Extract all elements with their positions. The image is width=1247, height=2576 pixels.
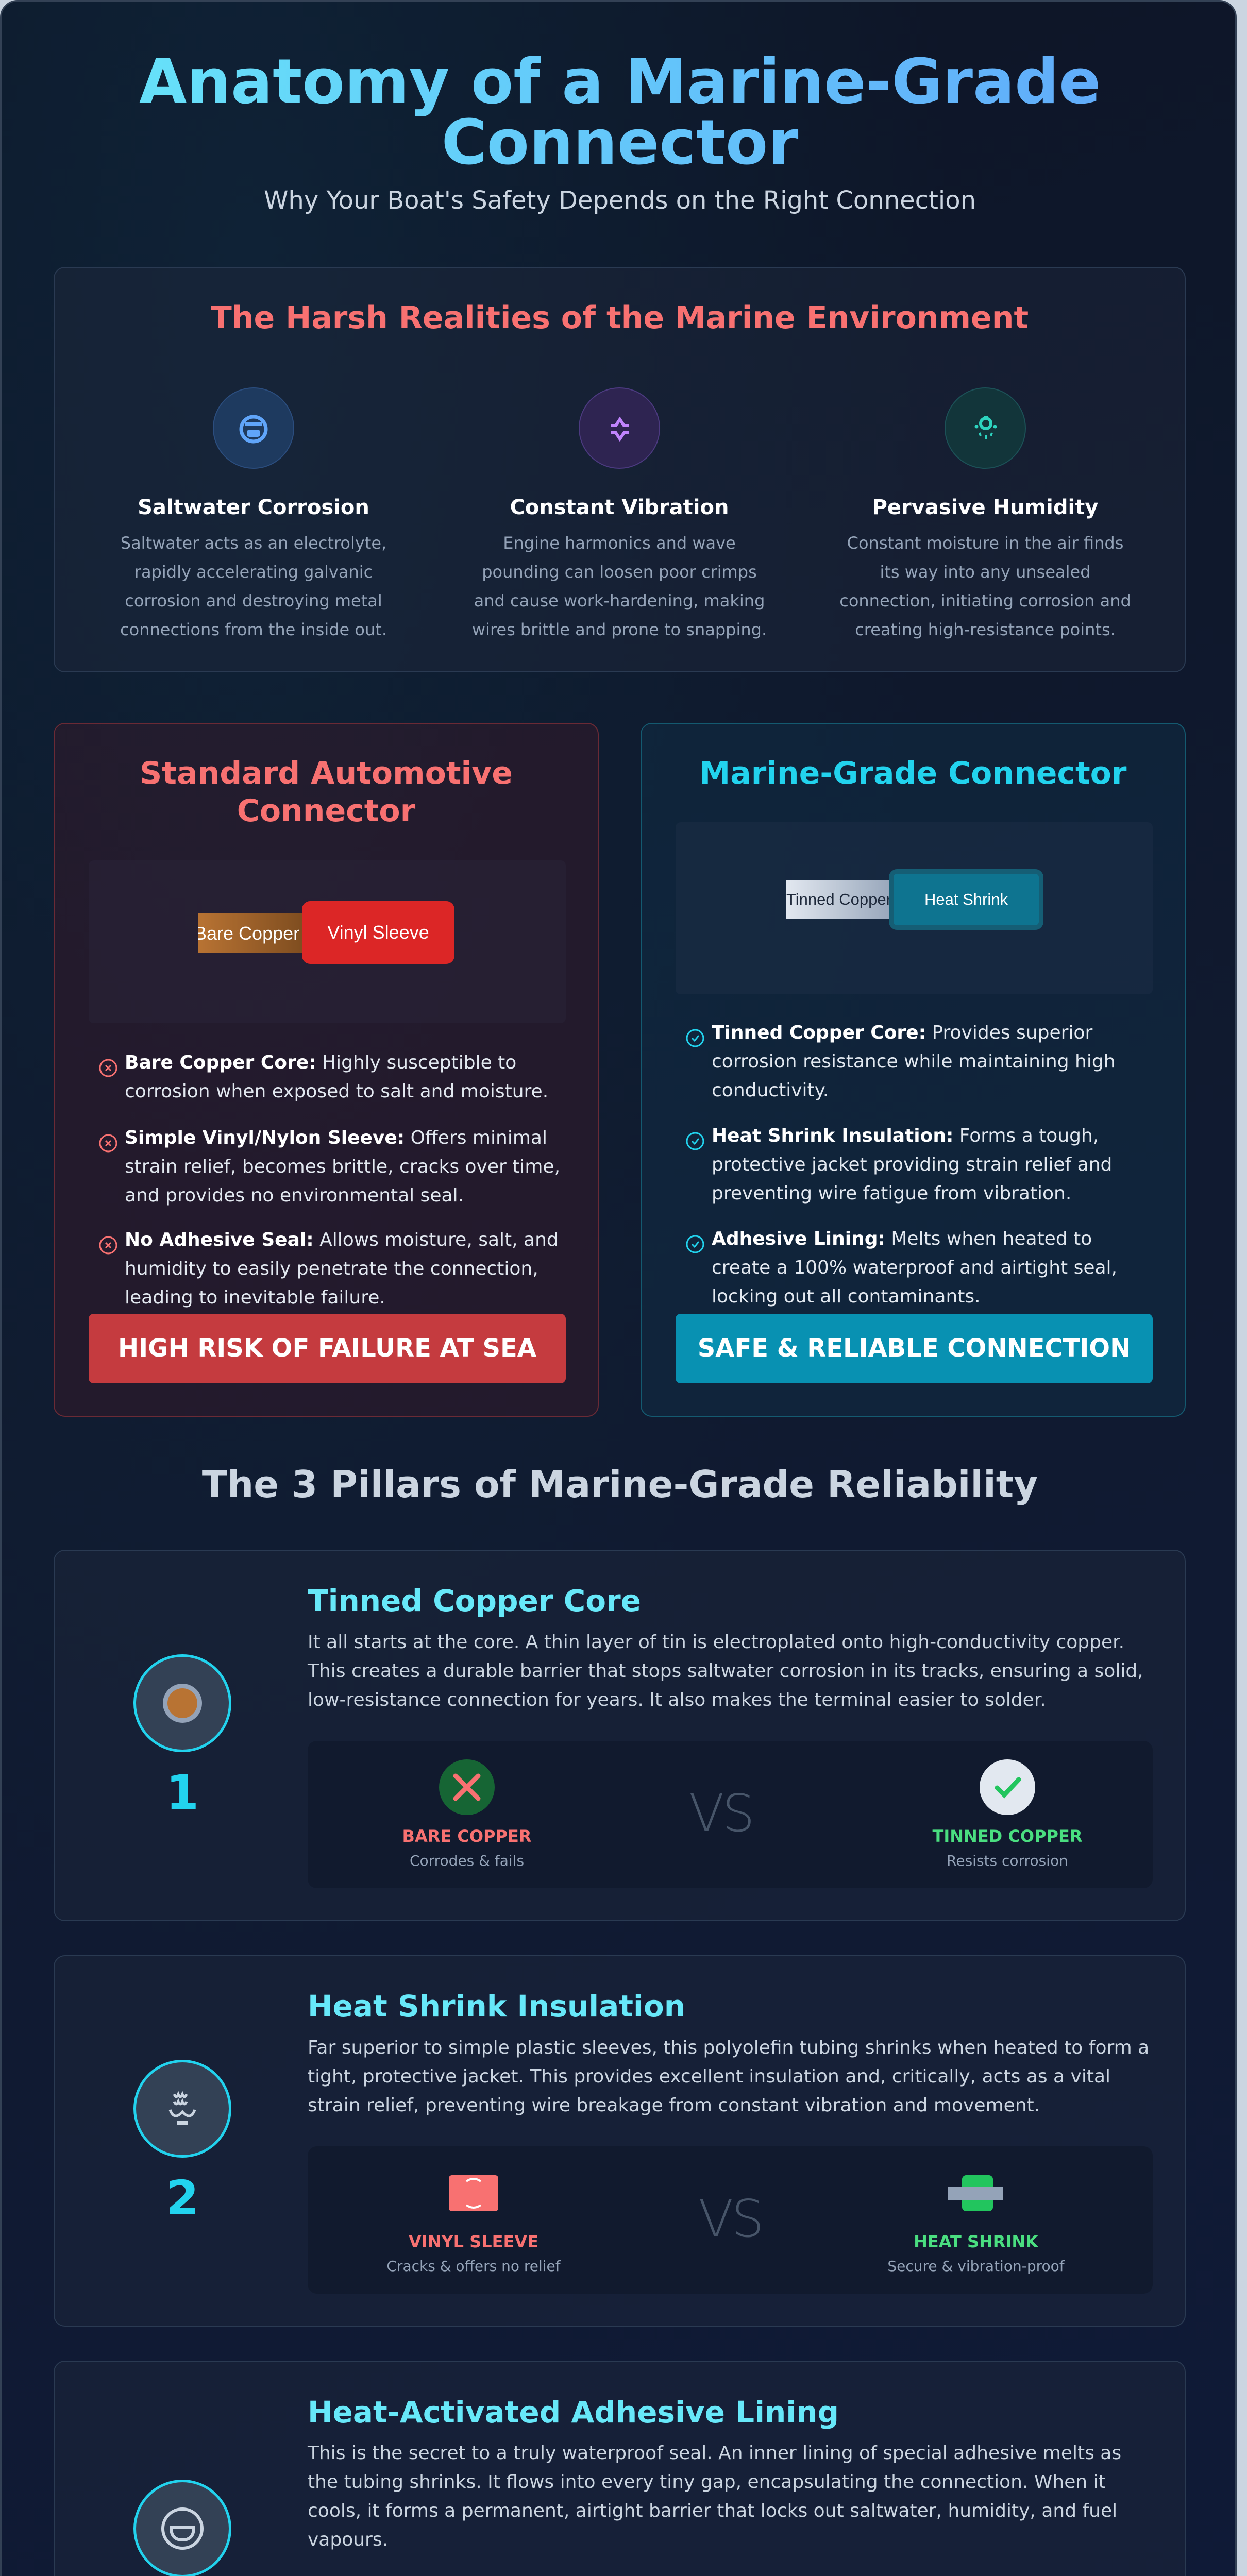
panel heading: The Harsh Realities of the Marine Environment [211,300,1029,336]
bullet: no adhesive seal [99,1229,559,1308]
bullet: tinned copper core: Tinned Copper Core: Provides superior [712,1022,1092,1043]
paragraph [307,1632,1143,1710]
bullet: tinned copper core [686,1022,1116,1101]
paragraph: tight, protective jacket. This provides excellent insulation and, critically, acts as a vital [308,2066,1110,2087]
comparison box [308,1741,1153,1888]
paragraph: cools, it forms a permanent, airtight barrier that locks out saltwater, humidity, and fuel [308,2500,1117,2521]
subtitle: Why Your Boat's Safety Depends on the Right Connection [264,186,976,215]
label: tinned copper: TINNED COPPER [933,1826,1082,1846]
banner: high risk: HIGH RISK OF FAILURE AT SEA [118,1334,536,1363]
vs: VS [698,2189,762,2249]
description: Saltwater acts as an electrolyte, [121,533,386,553]
heat shrink [889,869,1043,930]
paragraph [308,2439,1173,2554]
label: heat shrink: HEAT SHRINK [914,2232,1038,2251]
heading: Connector [237,793,415,829]
number 1: 1 [166,1765,199,1820]
label: bare copper: BARE COPPER [402,1826,531,1846]
description: wires brittle and prone to snapping. [472,620,767,639]
bullet: no adhesive seal: No Adhesive Seal: Allows moisture, salt, and [125,1229,559,1250]
bullet: vinyl sleeve: Simple Vinyl/Nylon Sleeve: Offers minimal [125,1127,547,1148]
sub: resists: Resists corrosion [947,1852,1068,1869]
description [839,533,1131,639]
bullet: no adhesive seal: humidity to easily penetrate the connection, [125,1258,538,1279]
title [2,52,1238,174]
tinned copper bar: Tinned Copper [786,890,891,908]
title: Heat Shrink Insulation [308,1989,685,2024]
bullet: tinned copper core: corrosion resistance while maintaining high [712,1051,1116,1072]
vinyl sleeve [302,901,454,964]
bullet: adhesive lining [686,1228,1117,1307]
bullet: heat shrink insulation: Heat Shrink Insulation: Forms a tough, [712,1125,1099,1146]
item: pervasive humidity [839,387,1131,639]
heading: Standard Automotive [140,755,513,791]
tinned copper bar [786,880,897,919]
paragraph: It all starts at the core. A thin layer of tin is electroplated onto high-conductivity copper. [308,1632,1124,1653]
vinyl sleeve: Vinyl Sleeve [327,922,429,943]
heading: Marine-Grade Connector [700,755,1126,791]
title: Anatomy of a Marine-Grade [139,46,1101,118]
description: Engine harmonics and wave [503,533,736,553]
bullet: adhesive lining: Adhesive Lining: Melts when heated to [712,1228,1092,1249]
icon: seal [133,2480,231,2576]
bullet: vinyl sleeve: and provides no environmental seal. [125,1185,464,1206]
paragraph: This creates a durable barrier that stops saltwater corrosion in its tracks, ensuring a solid, [308,1660,1143,1682]
section heading: 3 pillars: The 3 Pillars of Marine-Grade Reliability [202,1463,1038,1506]
description: pounding can loosen poor crimps [482,562,757,582]
bullet: adhesive lining: create a 100% waterproof and airtight seal, [712,1257,1117,1278]
description: connections from the inside out. [120,620,387,639]
panel: standard automotive connector [54,723,599,1417]
number 2: 2 [166,2171,199,2226]
sub: Secure & vibration-proof [887,2258,1065,2275]
pillar card 1: tinned copper core [54,1550,1186,1921]
title: Tinned Copper Core [308,1583,641,1618]
vs: VS [689,1783,753,1843]
bullet: heat shrink insulation [686,1125,1112,1204]
description: creating high-resistance points. [855,620,1116,639]
title: Heat-Activated Adhesive Lining [308,2395,839,2430]
description: corrosion and destroying metal [125,591,382,611]
description: Constant moisture in the air finds [847,533,1123,553]
bullet: heat shrink insulation: preventing wire fatigue from vibration. [712,1183,1071,1204]
bullet: bare copper core: Bare Copper Core: Highly susceptible to [125,1052,516,1073]
bullet: heat shrink insulation: protective jacket providing strain relief and [712,1154,1112,1175]
bullet list: weaknesses [99,1052,560,1308]
item: saltwater corrosion [120,387,387,639]
item: constant vibration [472,387,767,639]
heat shrink: Heat Shrink [924,890,1008,908]
pillar card 3: adhesive lining [54,2361,1186,2576]
description: its way into any unsealed [880,562,1091,582]
icon: heat waves [133,2060,231,2158]
paragraph: This is the secret to a truly waterproof seal. An inner lining of special adhesive melts as [308,2443,1121,2464]
description: rapidly accelerating galvanic [134,562,373,582]
label: vinyl sleeve: VINYL SLEEVE [409,2232,538,2251]
bullet: bare copper core: corrosion when exposed to salt and moisture. [125,1081,548,1102]
icon: bare copper X [439,1759,495,1815]
bullet: tinned copper core: conductivity. [712,1080,829,1101]
icon: vinyl sleeve [449,2175,498,2211]
heading: Pervasive Humidity [872,496,1098,519]
diagram: bare copper + vinyl sleeve [89,860,566,1023]
description [120,533,387,639]
heading: Constant Vibration [510,496,729,519]
pillar card 2: heat shrink insulation [54,1955,1186,2327]
comparison box [308,2146,1153,2294]
bullet: adhesive lining: locking out all contaminants. [712,1286,981,1307]
icon: tinned copper check [980,1759,1035,1815]
bullet: bare copper core [99,1052,548,1102]
icon: copper cross-section [133,1654,231,1752]
panel: harsh realities [54,267,1186,672]
icon: vibration [579,387,660,469]
diagram: tinned copper + heat shrink [676,822,1153,994]
paragraph: strain relief, preventing wire breakage from constant vibration and movement. [308,2095,1040,2116]
heading: Saltwater Corrosion [138,496,369,519]
paragraph [308,2037,1149,2116]
banner: safe & reliable [676,1314,1153,1383]
banner: safe & reliable: SAFE & RELIABLE CONNECTION [698,1334,1131,1363]
paragraph: the tubing shrinks. It flows into every tiny gap, encapsulating the connection. When it [308,2471,1106,2493]
description: connection, initiating corrosion and [839,591,1131,611]
icon: heat shrink [947,2173,1003,2214]
description: and cause work-hardening, making [474,591,765,611]
sub: corrodes: Corrodes & fails [410,1852,524,1869]
paragraph: vapours. [308,2529,388,2550]
icon: corrosion [213,387,294,469]
heading [140,755,513,829]
paragraph: low-resistance connection for years. It also makes the terminal easier to solder. [308,1689,1046,1710]
bullet: vinyl sleeve [99,1127,560,1206]
paragraph: Far superior to simple plastic sleeves, this polyolefin tubing shrinks when heated to form a [308,2037,1149,2058]
bullet: no adhesive seal: leading to inevitable failure. [125,1287,385,1308]
icon: humidity [945,387,1026,469]
panel: marine-grade connector [641,723,1186,1417]
banner: high risk [89,1314,566,1383]
bullet: vinyl sleeve: strain relief, becomes brittle, cracks over time, [125,1156,560,1177]
sub: Cracks & offers no relief [386,2258,561,2275]
title: Connector [442,107,798,179]
bullet list: strengths [686,1022,1117,1307]
bare copper bar [198,913,312,953]
description [472,533,767,639]
